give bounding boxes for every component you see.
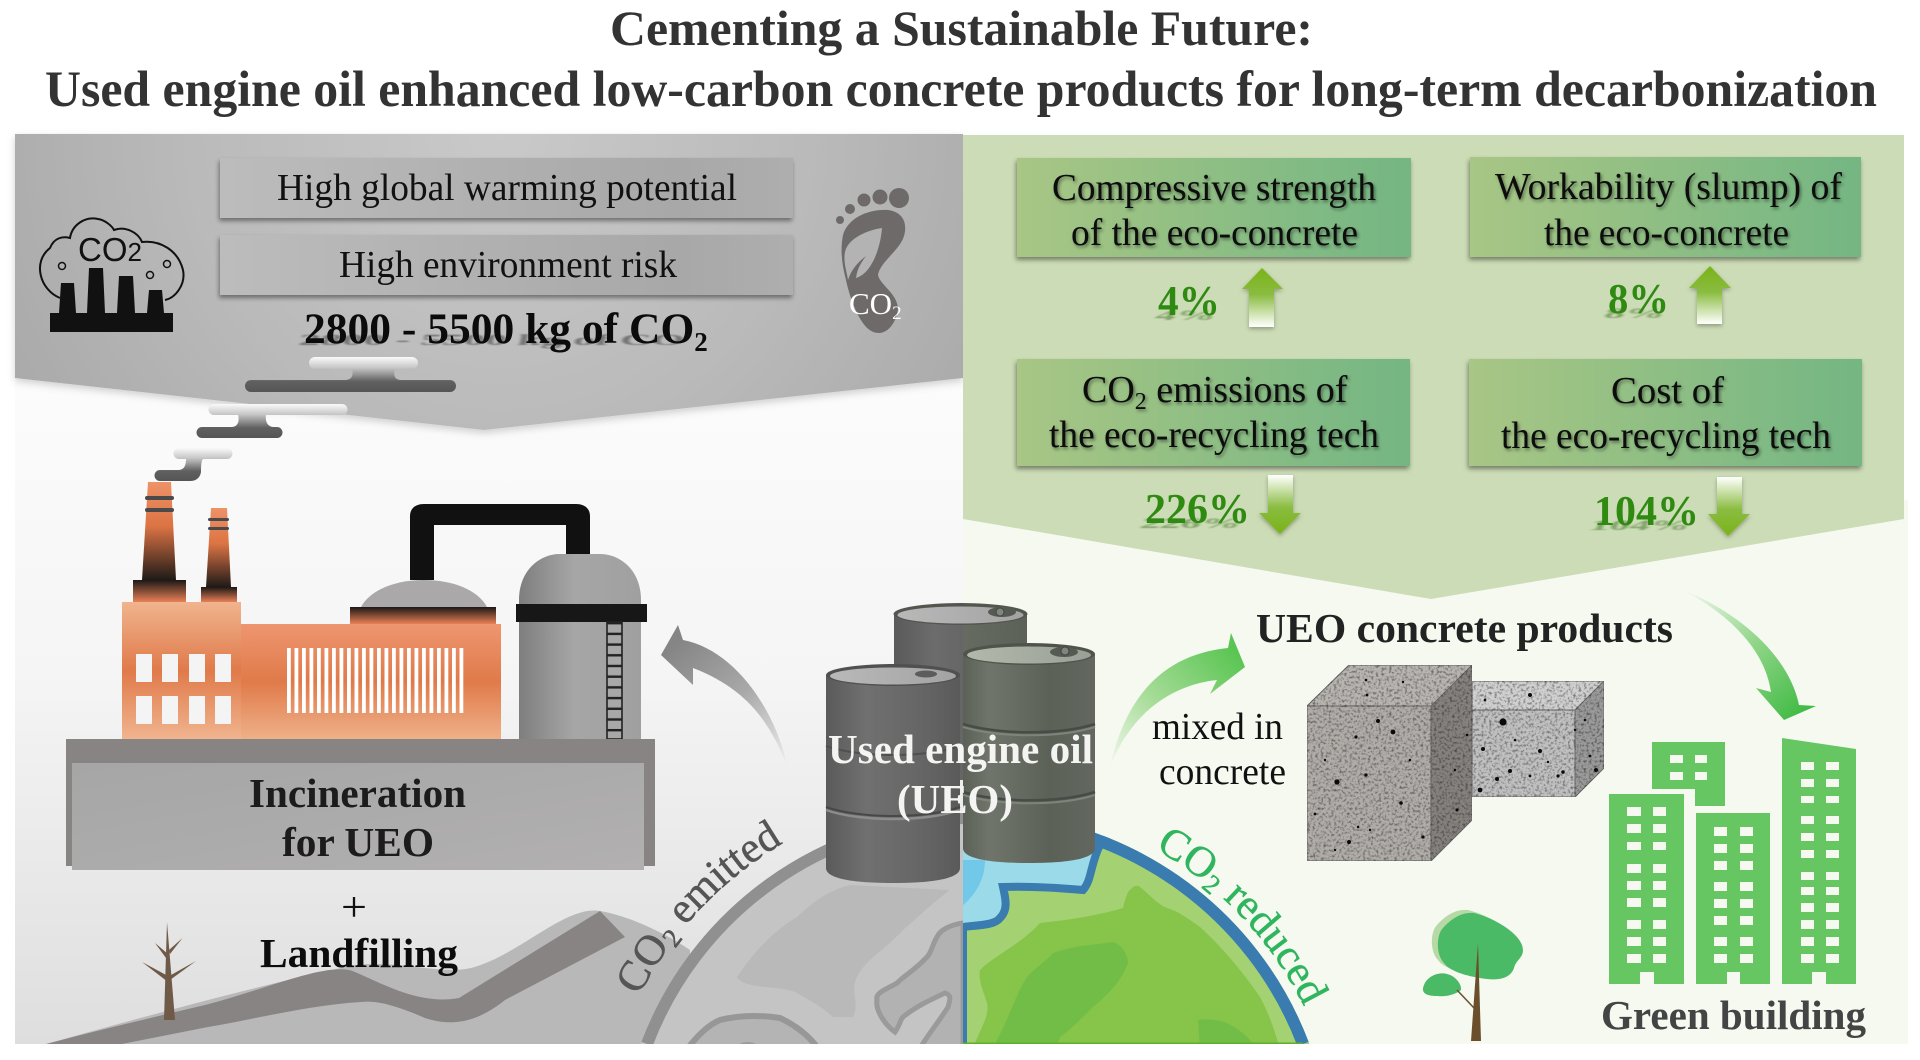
stat: CO2 mass: 2800 - 5500 kg of CO xyxy=(297,331,687,348)
platform: incineration for UEO xyxy=(66,739,655,870)
lower left background: incineration scene xyxy=(15,370,963,1044)
icon: CO2 footprint xyxy=(836,188,909,333)
stat: workability up 8%: 8% xyxy=(1608,277,1669,323)
icon: factory building xyxy=(122,602,501,739)
box: high global warming potential: High global warming potential xyxy=(277,167,737,209)
stat: CO2 mass: 2800 - 5500 kg of CO xyxy=(304,305,694,353)
box: compressive strength xyxy=(1017,158,1411,257)
icon: dead tree xyxy=(142,922,196,1020)
arrow: UEO to incineration xyxy=(661,625,787,765)
smoke plumes xyxy=(154,357,456,481)
building 1 xyxy=(1609,794,1684,984)
box: workability xyxy=(1470,157,1861,257)
icon: CO2 cloud and factory: CO2 xyxy=(78,231,142,268)
box: cost: Cost of xyxy=(1611,370,1724,412)
block small xyxy=(1472,681,1604,797)
barrel back xyxy=(894,603,1028,780)
arrow: concrete to buildings xyxy=(1683,590,1816,720)
illustration: grey half of the globe xyxy=(641,812,963,1048)
label: CO2 emitted along globe: 2 xyxy=(662,930,683,948)
label: CO2 emitted along globe: CO xyxy=(619,935,665,990)
arrow: UEO to concrete xyxy=(1110,633,1245,767)
block large xyxy=(1307,665,1472,861)
box: CO2 emissions: CO xyxy=(1082,369,1135,411)
box: high environment risk: High environment risk xyxy=(339,244,677,286)
box: CO2 emissions xyxy=(1017,359,1410,466)
label: CO2 reduced along globe: CO xyxy=(1161,830,1216,877)
label: used engine oil xyxy=(828,726,1093,822)
stat: strength up 4%: 4% xyxy=(1152,308,1220,323)
icon: green tree xyxy=(1423,910,1523,1041)
title xyxy=(45,0,1877,118)
label: used engine oil: (UEO) xyxy=(897,776,1013,822)
building 3 xyxy=(1782,738,1856,984)
stat: emissions down 226%: 226% xyxy=(1137,516,1245,531)
barrel right xyxy=(963,643,1095,863)
illustration: incineration plant xyxy=(66,482,655,870)
icon: storage tank with ladder xyxy=(516,554,647,739)
label: CO2 reduced along globe: reduced xyxy=(1223,884,1330,1006)
label: plus sign: + xyxy=(341,885,367,931)
label: used engine oil: Used engine oil xyxy=(828,726,1093,772)
box: workability: Workability (slump) of xyxy=(1495,166,1842,208)
icon: CO2 footprint: 2 xyxy=(892,303,902,324)
arrow: emissions down xyxy=(1259,475,1301,534)
panel: environmental burden of incineration xyxy=(15,134,963,430)
platform: incineration for UEO: for UEO xyxy=(282,819,434,865)
icon: CO2 footprint: CO xyxy=(849,286,892,321)
illustration: green buildings xyxy=(1609,738,1856,984)
label: mixed in concrete: mixed in xyxy=(1152,706,1283,748)
icon: chimneys xyxy=(133,482,237,602)
building small xyxy=(1652,742,1725,806)
box: CO2 emissions: emissions of xyxy=(1147,369,1348,411)
icon: dome xyxy=(361,580,487,607)
illustration: landfill hills xyxy=(46,911,690,1044)
stat: emissions down 226%: 226% xyxy=(1145,487,1250,533)
label: CO2 emitted along globe: emitted xyxy=(674,818,783,922)
stat: strength up 4%: 4% xyxy=(1158,279,1220,325)
label: green building: Green building xyxy=(1601,992,1866,1038)
illustration: green half of the globe xyxy=(963,832,1310,1044)
box: cost: the eco-recycling tech xyxy=(1501,415,1831,457)
building 2 xyxy=(1696,813,1770,984)
stat: cost down 104%: 104% xyxy=(1586,518,1694,533)
arrow: cost down xyxy=(1708,477,1750,536)
box: CO2 emissions: the eco-recycling tech xyxy=(1049,414,1379,456)
label: landfilling: Landfilling xyxy=(260,930,458,976)
stat: workability up 8%: 8% xyxy=(1601,306,1669,321)
stat: cost down 104%: 104% xyxy=(1594,489,1699,535)
icon: black pipe xyxy=(410,504,590,580)
box: CO2 emissions: 2 xyxy=(1135,389,1147,415)
title: Cementing a Sustainable Future: xyxy=(610,0,1313,56)
lower right background: eco scene xyxy=(963,500,1908,1044)
title: Used engine oil enhanced low-carbon concrete products for long-term decarbonization xyxy=(45,62,1877,118)
platform: incineration for UEO: Incineration xyxy=(249,770,466,816)
box: workability: the eco-concrete xyxy=(1544,212,1789,254)
box: high global warming potential xyxy=(220,158,793,218)
icon: CO2 cloud and factory xyxy=(40,218,184,332)
label: CO2 reduced along globe: 2 xyxy=(1201,874,1220,895)
barrel left xyxy=(826,664,960,883)
box: compressive strength: of the eco-concrete xyxy=(1071,212,1358,254)
box: compressive strength: Compressive strength xyxy=(1052,167,1376,209)
label: mixed in concrete xyxy=(1152,706,1286,793)
label: mixed in concrete: concrete xyxy=(1159,751,1286,793)
panel: eco-concrete performance xyxy=(963,135,1904,599)
arrow: strength up xyxy=(1242,268,1283,327)
heading: UEO concrete products: UEO concrete products xyxy=(1256,605,1673,651)
arrow: workability up xyxy=(1689,266,1731,324)
icon: oil barrels xyxy=(826,603,1095,883)
box: high environment risk xyxy=(220,235,793,295)
box: cost xyxy=(1469,359,1862,466)
stat: CO2 mass: 2 xyxy=(694,327,708,357)
illustration: concrete blocks xyxy=(1307,665,1604,861)
